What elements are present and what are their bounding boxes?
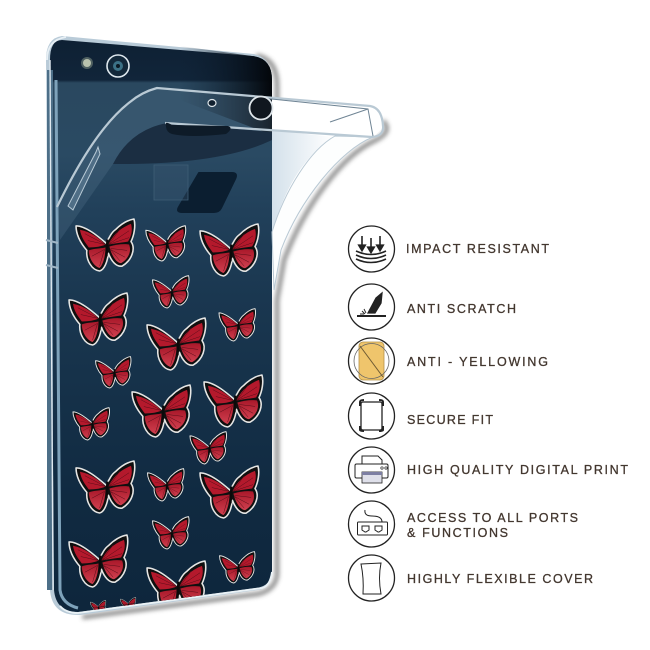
flash bbox=[81, 57, 93, 69]
phone with transparent case bbox=[46, 36, 387, 617]
label: ANTI - YELLOWING bbox=[407, 355, 548, 369]
icon: yellow case crossed bbox=[348, 338, 394, 384]
butterfly bbox=[146, 226, 186, 261]
feature: secure fit bbox=[348, 393, 493, 439]
side edge highlight bbox=[47, 37, 66, 60]
butterfly bbox=[120, 597, 136, 606]
label: SECURE FIT bbox=[407, 413, 493, 427]
feature: impact resistant bbox=[348, 226, 549, 272]
butterfly bbox=[76, 219, 135, 271]
icon: flexed cover bbox=[348, 555, 394, 601]
butterfly bbox=[200, 466, 259, 518]
icon: blade scratching surface bbox=[348, 284, 394, 330]
feature: anti yellowing bbox=[348, 338, 548, 384]
side button bump bbox=[68, 147, 100, 210]
butterfly bbox=[190, 432, 227, 464]
case translucent overlay bbox=[57, 88, 272, 240]
label: & FUNCTIONS bbox=[407, 526, 508, 540]
butterfly pattern bbox=[69, 219, 263, 614]
camera bbox=[107, 55, 129, 77]
butterfly bbox=[90, 600, 106, 610]
speaker slot bbox=[166, 123, 231, 136]
butterfly bbox=[96, 357, 131, 388]
fingerprint cutout bbox=[178, 173, 236, 212]
feature: ports access bbox=[348, 501, 578, 547]
clear case flap right of phone bbox=[272, 130, 333, 232]
butterfly bbox=[76, 461, 135, 513]
butterfly bbox=[147, 469, 184, 501]
butterfly bbox=[147, 318, 206, 370]
label: ANTI SCRATCH bbox=[407, 302, 516, 316]
label: HIGH QUALITY DIGITAL PRINT bbox=[407, 463, 628, 477]
label bbox=[407, 511, 578, 540]
icon: ports bbox=[348, 501, 394, 547]
butterfly bbox=[220, 552, 255, 583]
butterfly bbox=[132, 385, 191, 437]
butterfly bbox=[204, 375, 263, 427]
feature: anti scratch bbox=[348, 284, 516, 330]
label: HIGHLY FLEXIBLE COVER bbox=[407, 572, 593, 586]
feature: digital print bbox=[348, 447, 628, 493]
icon: impact arrows bbox=[348, 226, 394, 272]
butterfly bbox=[200, 224, 259, 276]
butterfly bbox=[146, 560, 207, 602]
label: ACCESS TO ALL PORTS bbox=[407, 511, 578, 525]
icon: printer bbox=[348, 447, 394, 493]
flap shadow bbox=[113, 123, 272, 164]
case port hole bbox=[250, 96, 272, 120]
butterfly bbox=[73, 408, 110, 440]
feature: flexible cover bbox=[348, 555, 593, 601]
butterfly bbox=[69, 293, 128, 345]
icon: phone case corners bbox=[348, 393, 394, 439]
butterfly bbox=[152, 517, 189, 549]
phone body bbox=[46, 36, 272, 615]
feature list bbox=[348, 226, 628, 601]
case small hole bbox=[208, 100, 216, 106]
label: IMPACT RESISTANT bbox=[406, 242, 549, 256]
butterfly bbox=[219, 309, 256, 341]
butterfly bbox=[152, 276, 189, 308]
butterfly bbox=[69, 535, 128, 587]
case shadow bbox=[84, 56, 387, 617]
flap outline bbox=[57, 88, 383, 207]
